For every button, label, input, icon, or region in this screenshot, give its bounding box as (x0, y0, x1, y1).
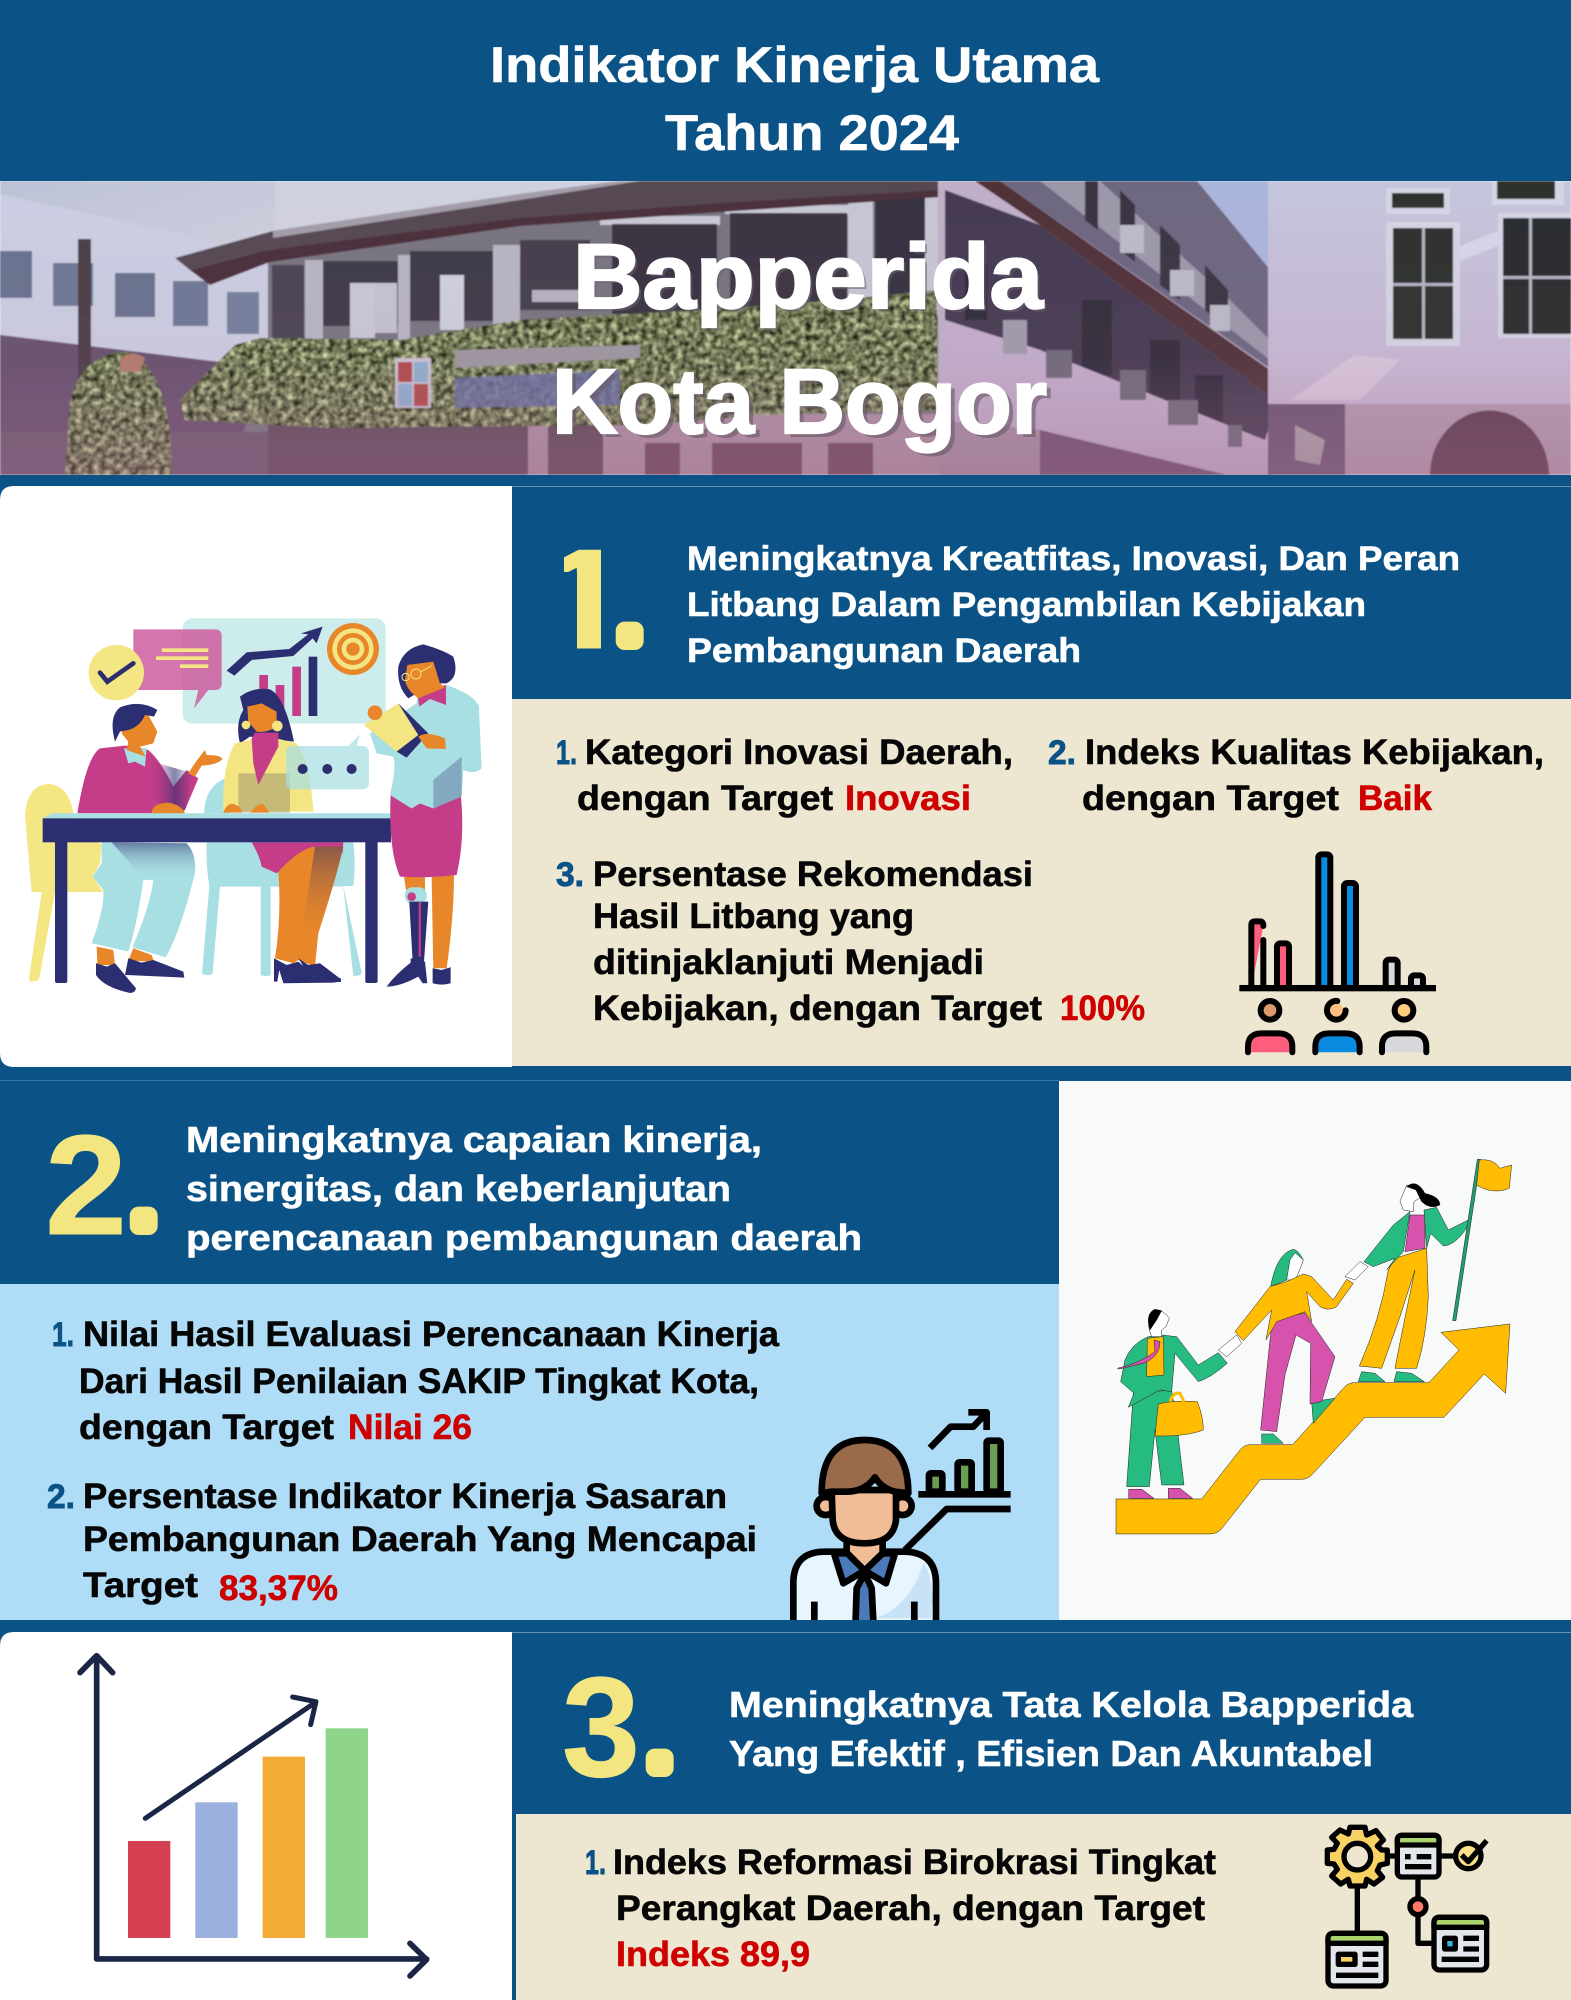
section 2 heading (186, 1119, 862, 1258)
photo: Bapperida building: Kota Bogor (552, 351, 1047, 453)
indicator 1.3: Kebijakan, dengan Target (593, 989, 1042, 1028)
indicator 2.2 (47, 1477, 757, 1608)
photo: Bapperida building (0, 181, 1571, 475)
icon: businessman with chart (793, 1412, 1011, 1640)
navy background bands (0, 475, 1571, 2000)
board with chart (183, 618, 386, 724)
indicator 1.2: 2. (1048, 734, 1076, 772)
title line 1: Indikator Kinerja Utama (490, 37, 1100, 93)
indicator 1.1 (556, 733, 1013, 818)
icon: bar chart with people (1239, 854, 1436, 1052)
rising arrow (1116, 1324, 1510, 1534)
indicator 2.2: Target (83, 1566, 198, 1605)
indicator 2.1: Nilai 26 (348, 1408, 472, 1447)
header banner (0, 0, 1571, 181)
illustration: team climbing arrow (1116, 1159, 1512, 1534)
woman seated (223, 689, 343, 983)
section 2 number: . (134, 1163, 153, 1241)
indicator 3.1 (585, 1843, 1216, 1974)
indicator 2.2: Persentase Indikator Kinerja Sasaran (83, 1477, 727, 1516)
indicator 1.2: Indeks Kualitas Kebijakan, (1085, 733, 1544, 772)
section 2 heading: perencanaan pembangunan daerah (186, 1217, 862, 1258)
woman middle (1235, 1249, 1368, 1443)
section 1 heading: Litbang Dalam Pengambilan Kebijakan (687, 586, 1366, 624)
section 1 heading: Meningkatnya Kreatfitas, Inovasi, Dan Peran (687, 540, 1460, 578)
indicator 1.3: 100% (1060, 989, 1145, 1028)
indicator 2.2: 83,37% (219, 1569, 338, 1608)
heading: Bapperida: Bapperida (576, 229, 1047, 331)
illustration: team meeting (25, 618, 482, 993)
indicator 2.1: Dari Hasil Penilaian SAKIP Tingkat Kota, (79, 1362, 759, 1401)
indicator 1.3: 3. (556, 856, 584, 894)
indicator 1.3: Persentase Rekomendasi (593, 855, 1033, 894)
man with briefcase (1117, 1309, 1242, 1498)
section 2 heading: sinergitas, dan keberlanjutan (186, 1168, 731, 1209)
indicator 1.2: dengan Target (1082, 779, 1339, 818)
indicator 1.3: Hasil Litbang yang (593, 897, 914, 936)
indicator 3.1: 1. (585, 1844, 606, 1882)
section 3 content panel (516, 1814, 1571, 2000)
indicator 2.1: 1. (52, 1316, 74, 1354)
indicator 3.1: Indeks 89,9 (616, 1935, 810, 1974)
section 3 number: 3 (562, 1648, 640, 1807)
woman with flag (1358, 1159, 1512, 1382)
section 2 heading: Meningkatnya capaian kinerja, (186, 1119, 762, 1160)
indicator 1.1: dengan Target (577, 779, 833, 818)
section 3 heading: Meningkatnya Tata Kelola Bapperida (729, 1684, 1414, 1725)
heading: Kota Bogor: Kota Bogor (557, 355, 1052, 457)
section 3 heading (729, 1684, 1414, 1774)
man seated (77, 704, 222, 993)
indicator 2.1: dengan Target (79, 1408, 334, 1447)
section 3 number: . (650, 1705, 669, 1783)
section 2 number: 2 (45, 1106, 127, 1265)
indicator 1.3 (556, 855, 1145, 1028)
section 1 number: 1 (536, 520, 635, 679)
panel: climbing illustration (1059, 1081, 1571, 1620)
indicator 2.2: 2. (47, 1478, 75, 1516)
table (43, 813, 391, 983)
section 1 heading (687, 540, 1460, 670)
indicator 1.1: Kategori Inovasi Daerah, (585, 733, 1013, 772)
indicator 1.2 (1048, 733, 1544, 818)
panel: section 1 (0, 486, 1571, 1067)
speech bubble dots (286, 734, 369, 789)
panel: section 3 (0, 1632, 1571, 2000)
indicator 1.1: Inovasi (845, 779, 971, 818)
section 2 content panel (0, 1284, 1059, 1620)
indicator 1.1: 1. (556, 734, 577, 772)
indicator 2.1: Nilai Hasil Evaluasi Perencanaan Kinerja (83, 1315, 780, 1354)
indicator 3.1: Indeks Reformasi Birokrasi Tingkat (613, 1843, 1216, 1882)
indicator 2.1 (52, 1315, 780, 1447)
section 1 content panel (512, 699, 1571, 1066)
indicator 3.1: Perangkat Daerah, dengan Target (616, 1889, 1205, 1928)
woman standing (364, 644, 482, 987)
icon: growth bar chart (80, 1656, 427, 1976)
panel: section 2 (0, 1080, 1571, 1640)
indicator 2.2: Pembangunan Daerah Yang Mencapai (83, 1520, 757, 1559)
icon: workflow gear (1327, 1827, 1487, 1986)
section 1 heading: Pembangunan Daerah (687, 632, 1081, 670)
speech bubble pink (133, 629, 222, 708)
section 1 number: . (620, 578, 639, 656)
chairs (25, 778, 362, 982)
section 3 heading: Yang Efektif , Efisien Dan Akuntabel (729, 1733, 1373, 1774)
section 1 number (564, 550, 644, 650)
title line 2: Tahun 2024 (665, 105, 959, 161)
photo: Bapperida building: Bapperida (573, 226, 1044, 328)
indicator 1.2: Baik (1358, 779, 1433, 818)
check badge (89, 645, 144, 700)
indicator 1.3: ditinjaklanjuti Menjadi (593, 943, 984, 982)
